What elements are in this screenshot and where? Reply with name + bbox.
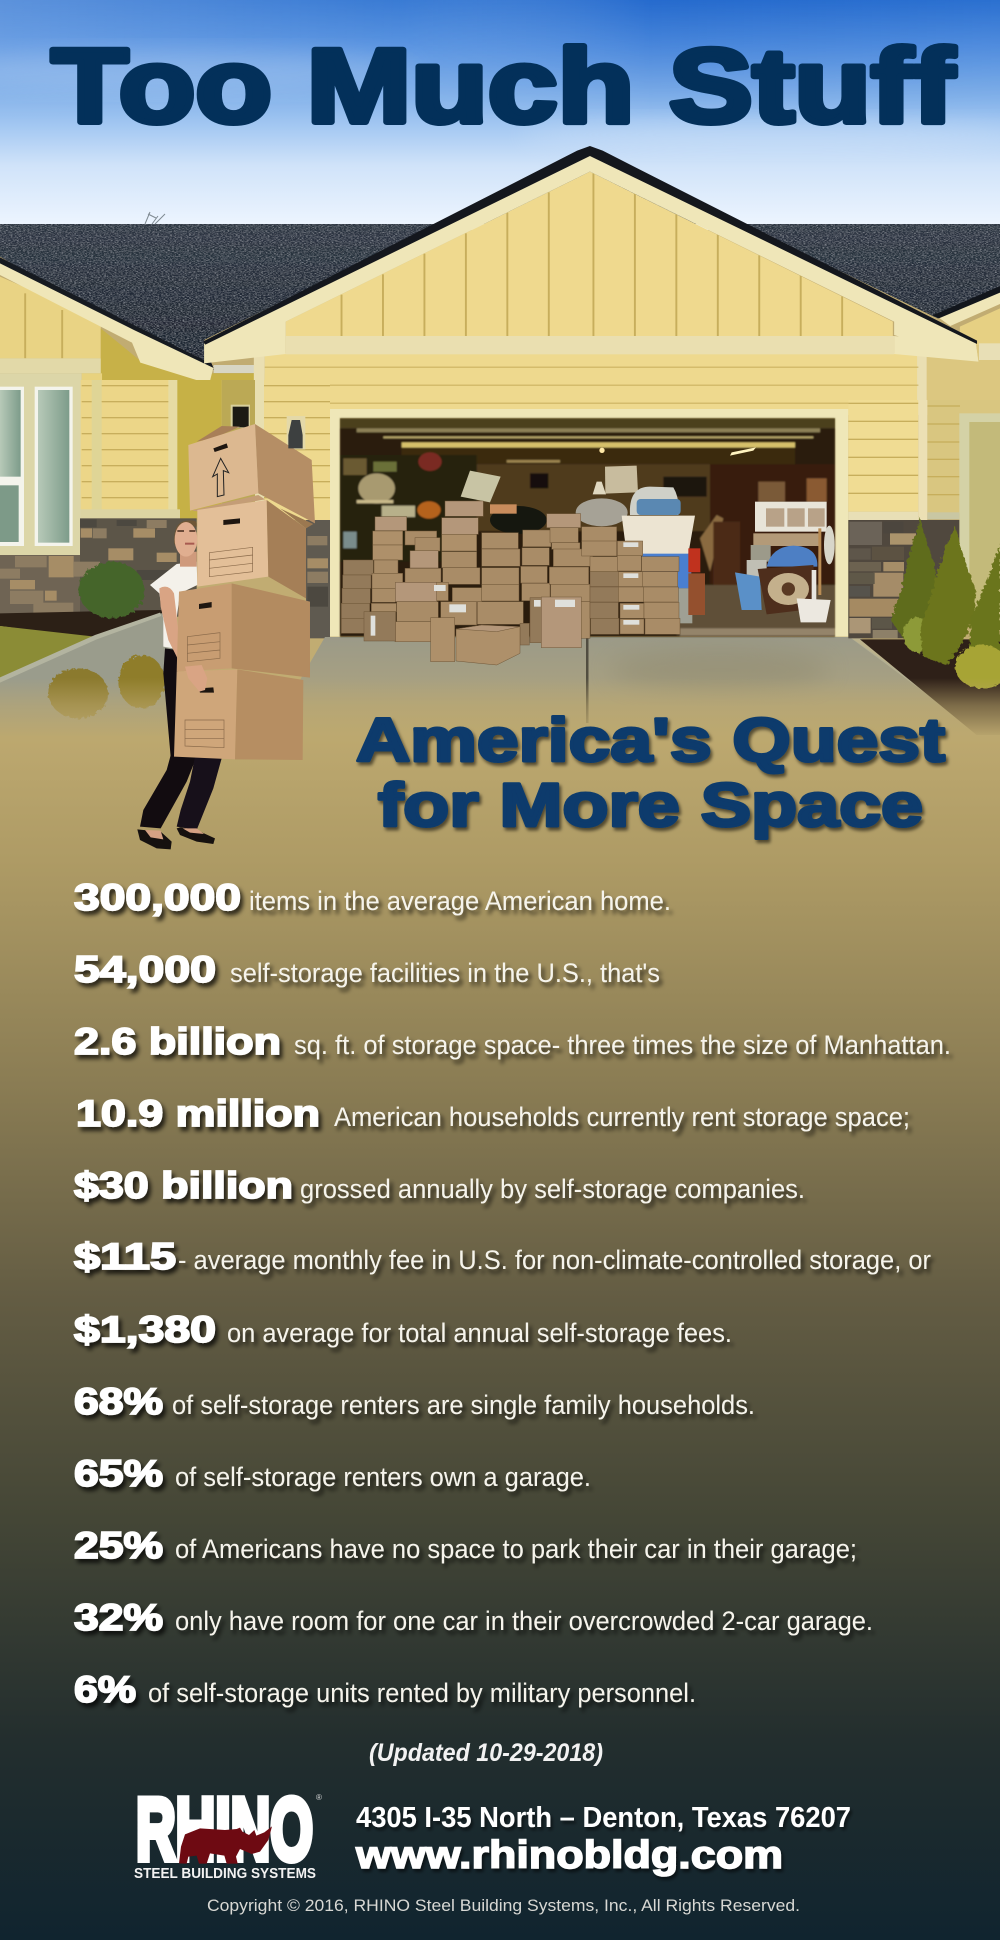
front wall <box>265 353 918 415</box>
window panes <box>0 387 73 546</box>
website: www.rhinobldg.com <box>355 1834 783 1877</box>
stat: 65%: 65% <box>74 1452 163 1494</box>
subtitle: America's Quest <box>356 706 945 774</box>
logo: RHINO Steel Building Systems: RHINO <box>136 1780 313 1878</box>
shrubs <box>48 655 165 718</box>
stone base <box>848 520 959 638</box>
title: Too Much Stuff <box>52 28 956 145</box>
garage <box>330 409 848 665</box>
copyright: Copyright © 2016, RHINO Steel Building Systems, Inc., All Rights Reserved. <box>207 1897 800 1915</box>
shirt <box>150 562 197 648</box>
stat: $115: $115 <box>74 1235 176 1277</box>
bush green <box>79 562 144 618</box>
stat: 25%: of Americans have no space to park their car in their garage; <box>175 1534 857 1564</box>
stat: 6%: 6% <box>74 1668 136 1710</box>
left gable siding <box>0 277 101 358</box>
hand <box>185 665 207 692</box>
tree 2 <box>920 526 976 665</box>
box 1 <box>188 424 315 523</box>
logo: RHINO Steel Building Systems: STEEL BUILDING SYSTEMS <box>134 1866 316 1882</box>
siding <box>848 400 918 512</box>
gutter <box>214 365 255 373</box>
box 3 <box>177 583 310 678</box>
legs <box>140 648 222 830</box>
stat: 300,000: 300,000 <box>74 876 241 918</box>
mulch bed <box>860 639 1000 735</box>
corner post <box>918 400 927 520</box>
stored items <box>461 466 835 623</box>
stat: 65% <box>74 1452 591 1494</box>
stat: 300,000 <box>74 876 671 918</box>
stat: $115 <box>74 1235 931 1277</box>
tree 1 <box>891 517 937 640</box>
wall lamp <box>288 420 303 448</box>
box labels <box>371 542 639 636</box>
wall sections <box>80 380 330 520</box>
gable band <box>286 336 894 354</box>
stat: 25%: 25% <box>74 1524 163 1566</box>
stat: $1,380: on average for total annual self-storage fees. <box>227 1318 732 1348</box>
stat: 300,000: items in the average American home. <box>249 886 671 916</box>
stat: 10.9 million <box>76 1092 910 1134</box>
left recess wall <box>101 328 268 415</box>
side door <box>959 413 1000 613</box>
stat: 54,000 <box>74 948 660 990</box>
stat: 2.6 billion <box>74 1020 951 1062</box>
sky <box>0 0 1000 230</box>
wall post left <box>254 353 265 415</box>
woman carrying boxes <box>137 420 315 849</box>
fade into tan <box>0 678 1000 738</box>
house upper: roof and gables <box>0 146 1000 415</box>
stat: 54,000: self-storage facilities in the U.S., that's <box>230 958 660 988</box>
shoes <box>137 827 215 849</box>
right wall upper <box>926 345 1000 415</box>
main gable fascia <box>204 154 978 363</box>
arm <box>159 587 207 692</box>
ridge edge <box>203 146 977 345</box>
window surround <box>0 380 81 555</box>
stat: 54,000: 54,000 <box>74 948 216 990</box>
stat: $30 billion <box>74 1164 805 1206</box>
right facade and evergreen trees <box>848 400 1000 735</box>
icon: rhino silhouette <box>179 1826 272 1864</box>
stat: 65%: of self-storage renters own a garage. <box>175 1462 591 1492</box>
stat: 6%: of self-storage units rented by military personnel. <box>148 1678 696 1708</box>
subtitle: for More Space <box>378 771 923 839</box>
logo: RHINO Steel Building Systems: ® <box>316 1793 322 1802</box>
stat: $30 billion: grossed annually by self-storage companies. <box>300 1174 805 1204</box>
yellow shrub <box>955 645 1000 688</box>
wall post right <box>917 353 927 415</box>
stacked cardboard boxes <box>341 501 680 665</box>
tree 3 <box>968 543 1000 667</box>
left gable fascia <box>0 262 214 384</box>
left facade and landscape <box>0 380 330 737</box>
shrub small <box>903 618 931 652</box>
stat: 68%: of self-storage renters are single family households. <box>172 1390 755 1420</box>
update note: (Updated 10-29-2018) <box>369 1739 603 1767</box>
stat: 10.9 million: 10.9 million <box>76 1092 320 1134</box>
roof shingles <box>0 150 1000 370</box>
garage interior <box>340 418 835 637</box>
logo: RHINO Steel Building Systems <box>134 1780 322 1882</box>
ceiling lights <box>593 447 756 494</box>
stat: 68%: 68% <box>74 1380 163 1422</box>
right gable fascia <box>960 308 1000 345</box>
stat: 32%: only have room for one car in their overcrowded 2-car garage. <box>175 1606 873 1636</box>
sill <box>848 512 918 520</box>
box 2 <box>197 500 313 598</box>
stat: 32% <box>74 1596 873 1638</box>
ground <box>0 610 177 638</box>
stat: $1,380: $1,380 <box>74 1308 216 1350</box>
stat: 25% <box>74 1524 857 1566</box>
stat: 68% <box>74 1380 755 1422</box>
stat: $115: - average monthly fee in U.S. for non-climate-controlled storage, or <box>178 1245 931 1275</box>
subtitle <box>356 706 945 839</box>
main gable siding <box>286 172 893 336</box>
stat: 2.6 billion: sq. ft. of storage space- three times the size of Manhattan. <box>294 1030 951 1060</box>
address: 4305 I-35 North – Denton, Texas 76207 <box>356 1802 851 1834</box>
driveway <box>170 636 1000 737</box>
lamp plate <box>287 416 305 449</box>
box 4 <box>174 669 303 760</box>
stat: $30 billion: $30 billion <box>74 1164 293 1206</box>
stat: 10.9 million: American households currently rent storage space; <box>334 1102 910 1132</box>
head <box>174 520 197 567</box>
left gable band <box>0 358 102 373</box>
stat: 32%: 32% <box>74 1596 163 1638</box>
stone wall <box>0 518 330 638</box>
garage door frame <box>330 409 848 637</box>
entry door dark <box>231 405 250 428</box>
stat: $1,380 <box>74 1308 732 1350</box>
stat: 6% <box>74 1668 696 1710</box>
stat: 2.6 billion: 2.6 billion <box>74 1020 281 1062</box>
